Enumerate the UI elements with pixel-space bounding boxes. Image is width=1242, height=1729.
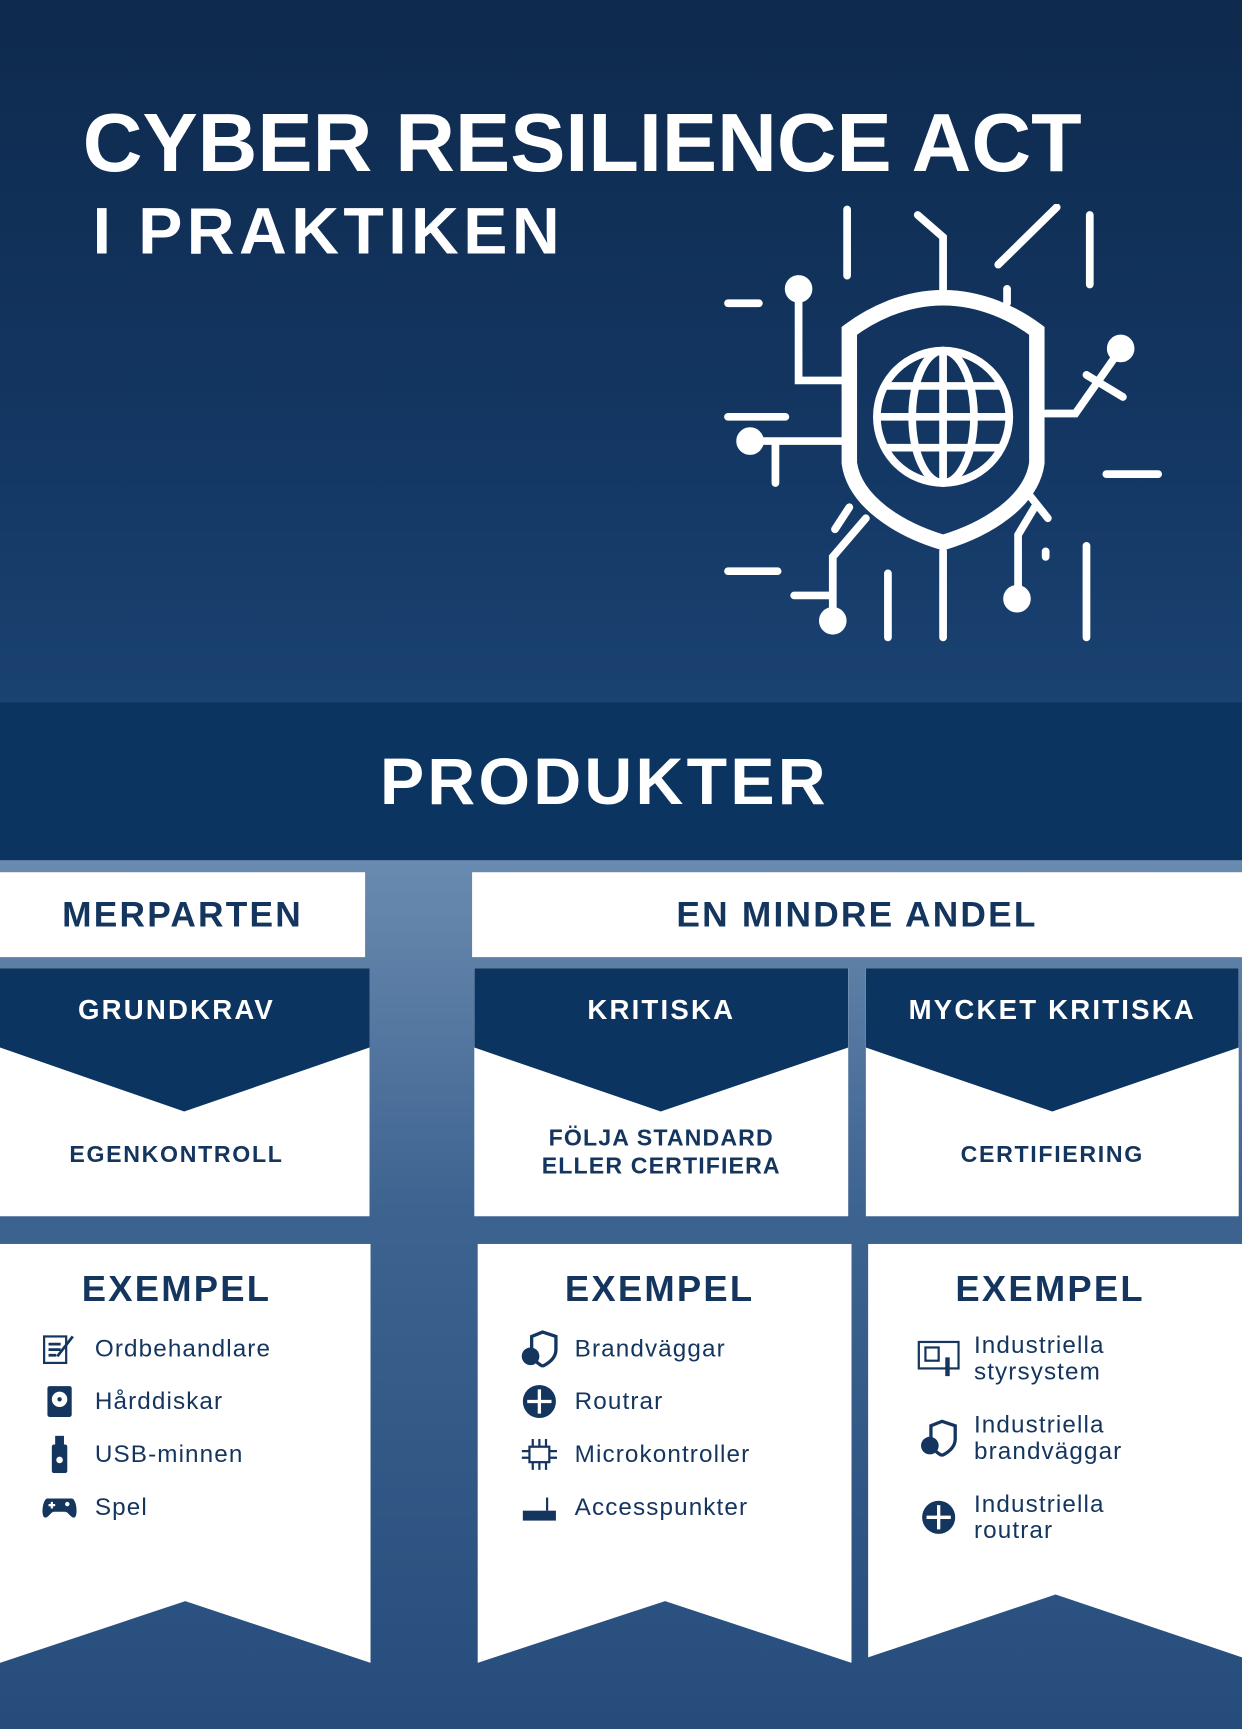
panel: exempel kritiska: Routrar xyxy=(575,1387,663,1415)
card: mycket kritiska xyxy=(866,968,1239,1216)
card: kritiska: ELLER CERTIFIERA xyxy=(542,1153,781,1179)
panel: exempel mycket kritiska: styrsystem xyxy=(974,1357,1101,1385)
panel: exempel kritiska: EXEMPEL xyxy=(565,1268,754,1309)
panel: exempel grundkrav xyxy=(0,1244,371,1663)
card: kritiska: FÖLJA STANDARD xyxy=(549,1126,774,1151)
section band: produkter xyxy=(0,702,1242,860)
card: grundkrav: GRUNDKRAV xyxy=(78,995,275,1025)
card: grundkrav: EGENKONTROLL xyxy=(69,1142,284,1168)
card: grundkrav xyxy=(0,968,370,1216)
panel: exempel mycket kritiska: Industriella xyxy=(974,1410,1105,1438)
panel: exempel mycket kritiska: brandväggar xyxy=(974,1437,1122,1464)
title: CYBER RESILIENCE ACT xyxy=(83,96,1082,189)
panel: exempel grundkrav: EXEMPEL xyxy=(82,1268,271,1309)
card: mycket kritiska: CERTIFIERING xyxy=(961,1142,1144,1168)
card: mycket kritiska: MYCKET KRITISKA xyxy=(909,995,1196,1025)
panel: exempel mycket kritiska: Industriella xyxy=(974,1331,1105,1359)
label: en mindre andel: EN MINDRE ANDEL xyxy=(676,894,1038,934)
panel: exempel mycket kritiska: routrar xyxy=(974,1516,1053,1544)
panel: exempel kritiska: Accesspunkter xyxy=(575,1493,748,1521)
panel: exempel grundkrav: USB-minnen xyxy=(95,1440,243,1468)
panel: exempel mycket kritiska: EXEMPEL xyxy=(955,1268,1145,1309)
label: merparten: MERPARTEN xyxy=(62,894,303,934)
section band: produkter: PRODUKTER xyxy=(380,744,829,818)
panel: exempel kritiska xyxy=(478,1244,852,1663)
panel: exempel mycket kritiska: Industriella xyxy=(974,1490,1105,1517)
top background xyxy=(0,0,1242,706)
panel: exempel kritiska: Microkontroller xyxy=(575,1440,750,1468)
panel: exempel grundkrav: Hårddiskar xyxy=(95,1387,223,1415)
panel: exempel grundkrav: Ordbehandlare xyxy=(95,1334,271,1362)
panel: exempel grundkrav: Spel xyxy=(95,1493,148,1521)
label: merparten xyxy=(0,872,365,957)
card: kritiska: KRITISKA xyxy=(587,995,735,1025)
subtitle: I PRAKTIKEN xyxy=(93,194,564,268)
lower background xyxy=(0,860,1242,1729)
icon: circuit shield globe xyxy=(724,204,1162,642)
panel: exempel mycket kritiska xyxy=(868,1244,1242,1658)
panel: exempel kritiska: Brandväggar xyxy=(575,1334,726,1362)
card: kritiska xyxy=(474,968,848,1216)
label: en mindre andel xyxy=(472,872,1242,957)
